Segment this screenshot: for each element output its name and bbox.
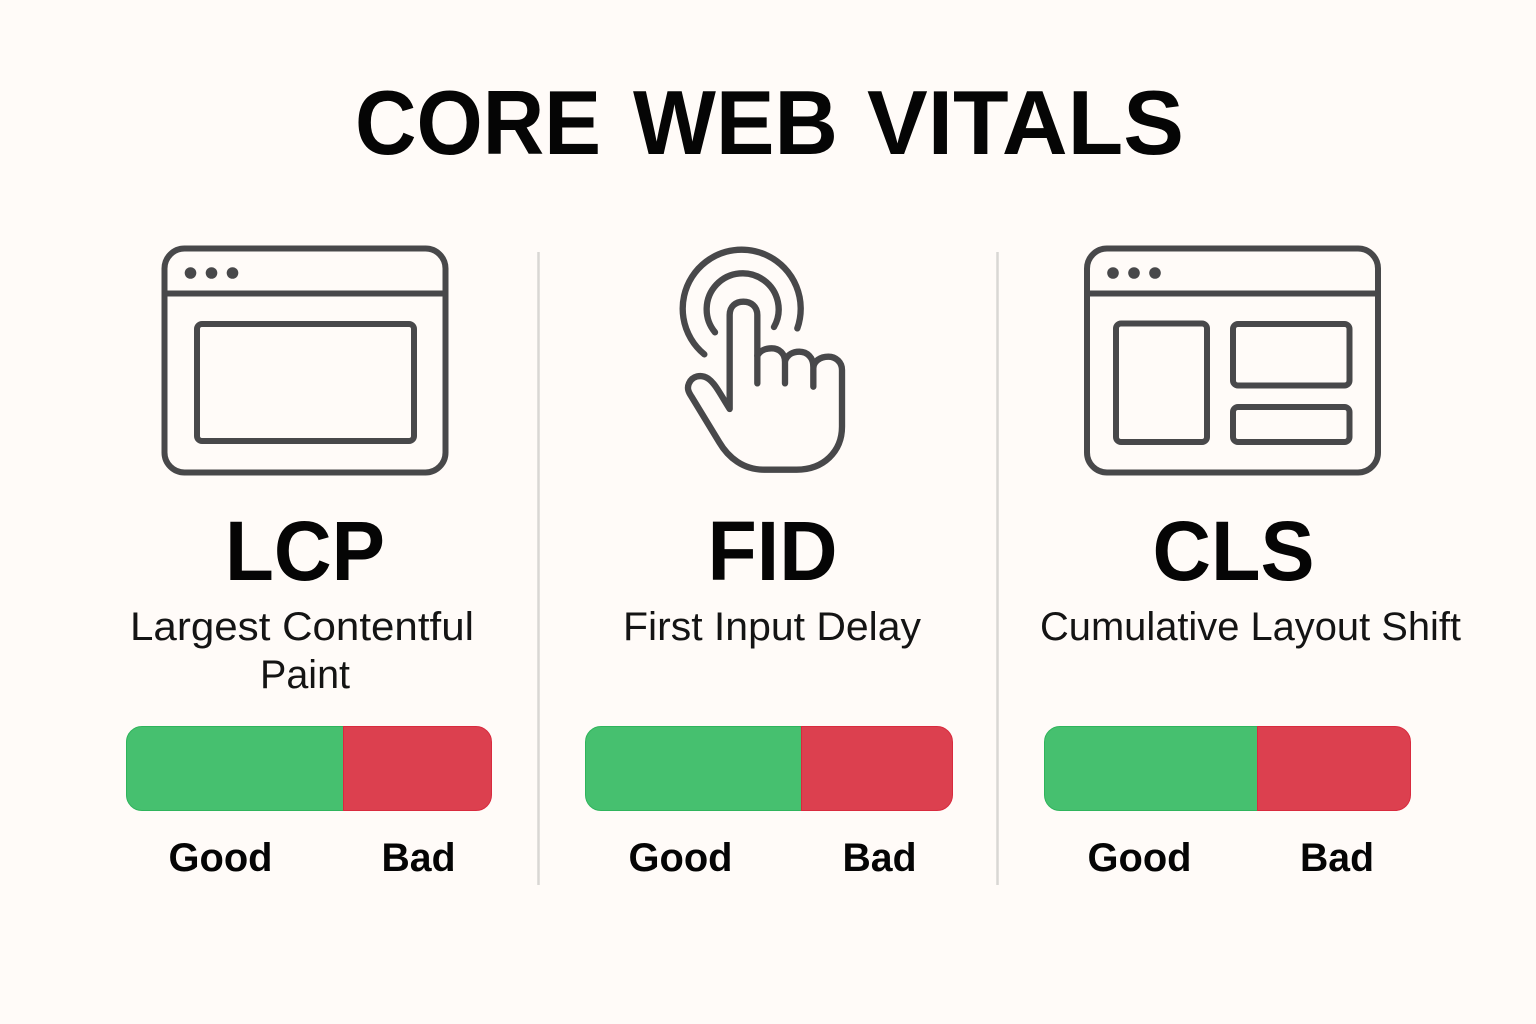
title: CORE [355,73,601,174]
LCP heading: LCP [225,504,385,598]
CLS Bad label: Bad [1300,836,1374,880]
panel: CLS [1040,248,1461,880]
FID Bad label: Bad [842,836,916,880]
LCP good/bad bar [126,726,492,810]
icon: tapping hand [683,250,842,470]
CLS heading: CLS [1152,504,1314,598]
FID Good label: Good [628,836,732,880]
FID description: First Input Delay [623,605,921,649]
LCP description: Largest Contentful [130,605,474,649]
CLS good/bad bar [1044,726,1410,810]
icon: browser window with a single content block [164,248,446,472]
FID heading: FID [708,504,838,598]
FID good/bad bar [586,726,952,810]
panel: LCP [126,248,492,880]
panel: FID [586,250,952,880]
title: VITALS [867,73,1184,174]
LCP Bad label: Bad [382,836,456,880]
LCP description: Paint [260,653,350,697]
LCP Good label: Good [168,836,272,880]
CLS Good label: Good [1088,836,1192,880]
icon: browser window with layout blocks [1087,248,1378,472]
CLS description: Cumulative Layout Shift [1040,605,1461,649]
LCP description [130,605,474,697]
title [355,73,1184,174]
title: WEB [633,73,838,174]
